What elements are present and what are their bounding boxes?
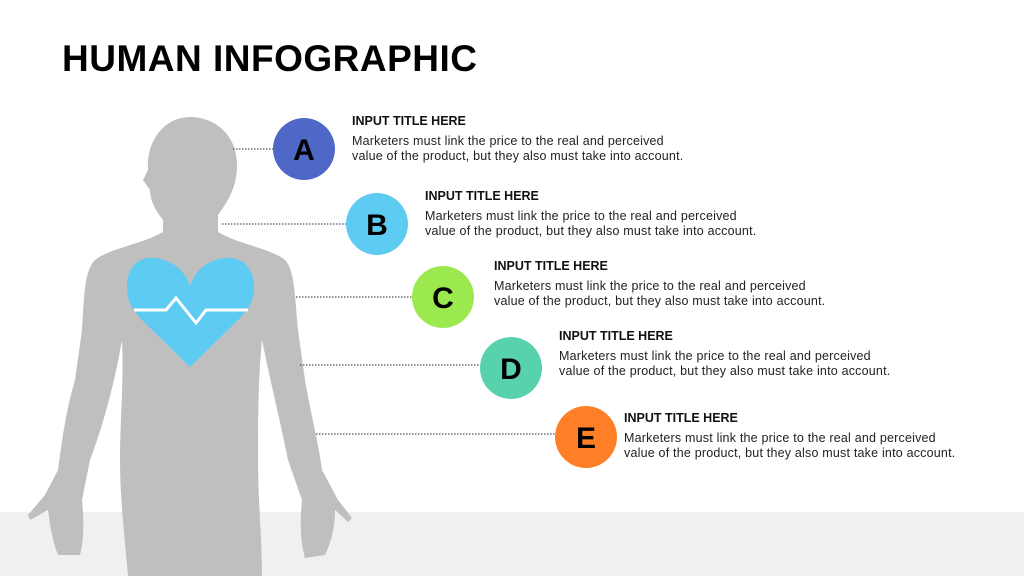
text block A: Marketers must link the price to the real and perceived: [352, 134, 664, 148]
text block E: INPUT TITLE HERE: [624, 411, 738, 425]
text block E: [624, 411, 955, 460]
text block B: Marketers must link the price to the real and perceived: [425, 209, 737, 223]
text block B: [425, 189, 756, 238]
text block A: [352, 114, 683, 163]
human silhouette: [28, 117, 352, 576]
badge D: D: [500, 353, 522, 386]
badge B: B: [366, 209, 388, 242]
text block C: Marketers must link the price to the real and perceived: [494, 279, 806, 293]
badge E: E: [576, 422, 596, 455]
text block D: [559, 329, 890, 378]
badge A: [273, 118, 335, 180]
text block D: value of the product, but they also must take into account.: [559, 364, 890, 378]
text block D: INPUT TITLE HERE: [559, 329, 673, 343]
text block B: INPUT TITLE HERE: [425, 189, 539, 203]
text block E: Marketers must link the price to the real and perceived: [624, 431, 936, 445]
badge D: [480, 337, 542, 399]
text block C: INPUT TITLE HERE: [494, 259, 608, 273]
badge B: [346, 193, 408, 255]
connectors: [222, 149, 555, 434]
badge A: A: [293, 134, 315, 167]
badge E: [555, 406, 617, 468]
text block A: value of the product, but they also must take into account.: [352, 149, 683, 163]
text block C: value of the product, but they also must take into account.: [494, 294, 825, 308]
badge C: C: [432, 282, 454, 315]
text block D: Marketers must link the price to the real and perceived: [559, 349, 871, 363]
text block B: value of the product, but they also must take into account.: [425, 224, 756, 238]
title: HUMAN INFOGRAPHIC: [62, 38, 477, 79]
badge C: [412, 266, 474, 328]
text block A: INPUT TITLE HERE: [352, 114, 466, 128]
text block E: value of the product, but they also must take into account.: [624, 446, 955, 460]
text block C: [494, 259, 825, 308]
icon: heart with pulse: [127, 258, 254, 367]
